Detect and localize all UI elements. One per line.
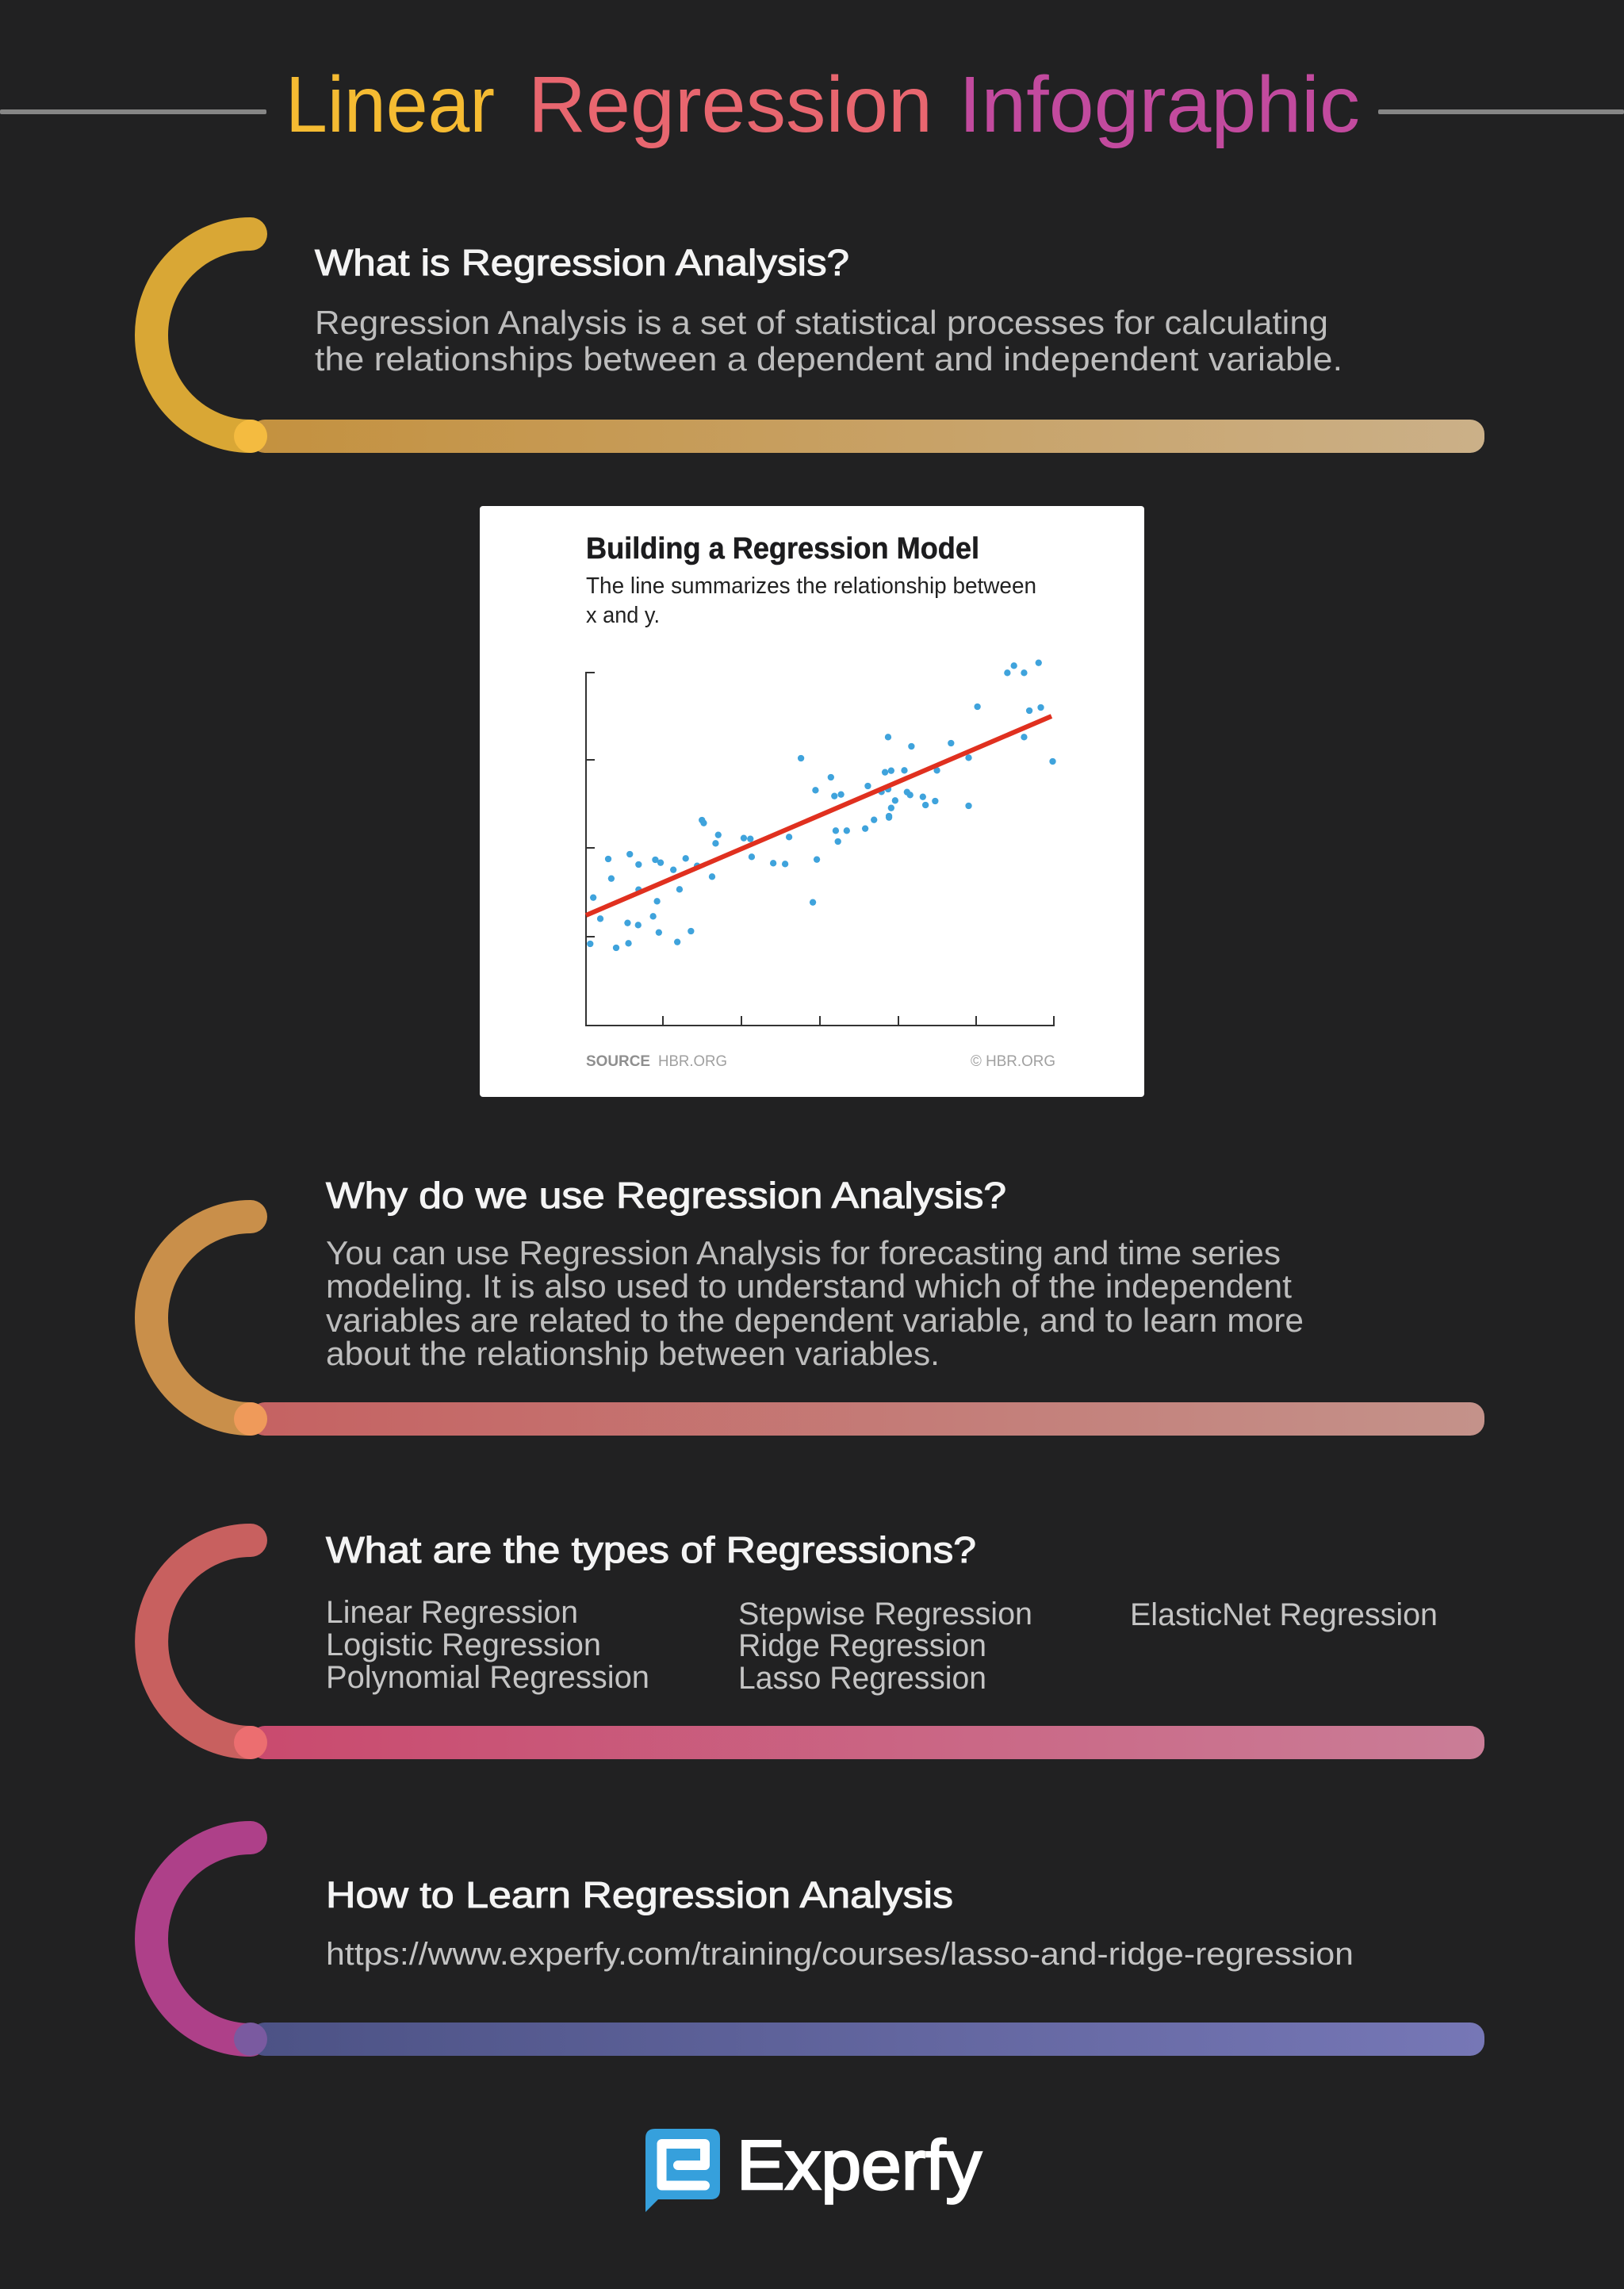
icon: speech bubble e (645, 2129, 720, 2212)
list: column 1: Logistic Regression (326, 1628, 601, 1662)
chart title: Building a Regression Model (586, 532, 979, 566)
wordmark: Experfy (737, 2126, 982, 2204)
regression line (586, 716, 1051, 915)
scatter points (587, 659, 1056, 951)
link text: https://www.experfy.com/training/courses/lasso-and-ridge-regression (326, 1937, 1354, 1972)
list: column 1 (326, 1595, 649, 1695)
list: column 3: ElasticNet Regression (1130, 1597, 1438, 1632)
title: Linear (285, 60, 495, 149)
chart source: HBR.ORG (658, 1053, 727, 1070)
title: Regression (528, 60, 933, 149)
chart axes (586, 672, 1055, 1026)
heading: types of regressions: What are the types of Regressions? (326, 1529, 976, 1570)
title (0, 60, 1624, 149)
body text: uses: You can use Regression Analysis for forecasting and time series (326, 1234, 1281, 1271)
chart subtitle (586, 573, 1036, 628)
body text: uses: modeling. It is also used to understand which of the independent (326, 1267, 1292, 1305)
panel: how to learn regression analysis (151, 1838, 1484, 2056)
body text: uses: variables are related to the dependent variable, and to learn more (326, 1302, 1304, 1339)
panel: scatter chart card (480, 506, 1144, 1097)
chart subtitle: The line summarizes the relationship between (586, 573, 1036, 599)
heading: why do we use regression analysis: Why do we use Regression Analysis? (326, 1175, 1006, 1216)
body text: definition: the relationships between a dependent and independent variable. (315, 340, 1342, 378)
list: column 2 (738, 1597, 1032, 1696)
body text: definition: Regression Analysis is a set of statistical processes for calculating (315, 304, 1328, 341)
bracket: section 2 (151, 1217, 1484, 1436)
heading: what is regression analysis: What is Regression Analysis? (315, 242, 849, 283)
heading: how to learn: How to Learn Regression Analysis (326, 1874, 953, 1915)
bracket: section 3 (151, 1540, 1484, 1759)
logo: Experfy (645, 2126, 982, 2212)
list: column 2: Stepwise Regression (738, 1597, 1032, 1631)
chart subtitle: x and y. (586, 603, 660, 628)
chart source (586, 1053, 1055, 1070)
bracket: section 4 (151, 1838, 1484, 2056)
list: column 1: Linear Regression (326, 1595, 578, 1630)
panel: types of regressions (151, 1529, 1484, 1759)
body text: uses (326, 1234, 1304, 1372)
list: column 1: Polynomial Regression (326, 1660, 649, 1695)
list: column 2: Lasso Regression (738, 1661, 986, 1696)
list: column 2: Ridge Regression (738, 1628, 986, 1663)
chart source: © HBR.ORG (971, 1053, 1055, 1070)
title: Infographic (959, 60, 1360, 149)
panel: why do we use regression analysis (151, 1175, 1484, 1436)
chart source: SOURCE (586, 1053, 650, 1070)
panel: what is regression analysis (151, 234, 1484, 453)
bracket: section 1 (151, 234, 1484, 453)
body text: definition (315, 304, 1342, 378)
body text: uses: about the relationship between variables. (326, 1335, 940, 1372)
